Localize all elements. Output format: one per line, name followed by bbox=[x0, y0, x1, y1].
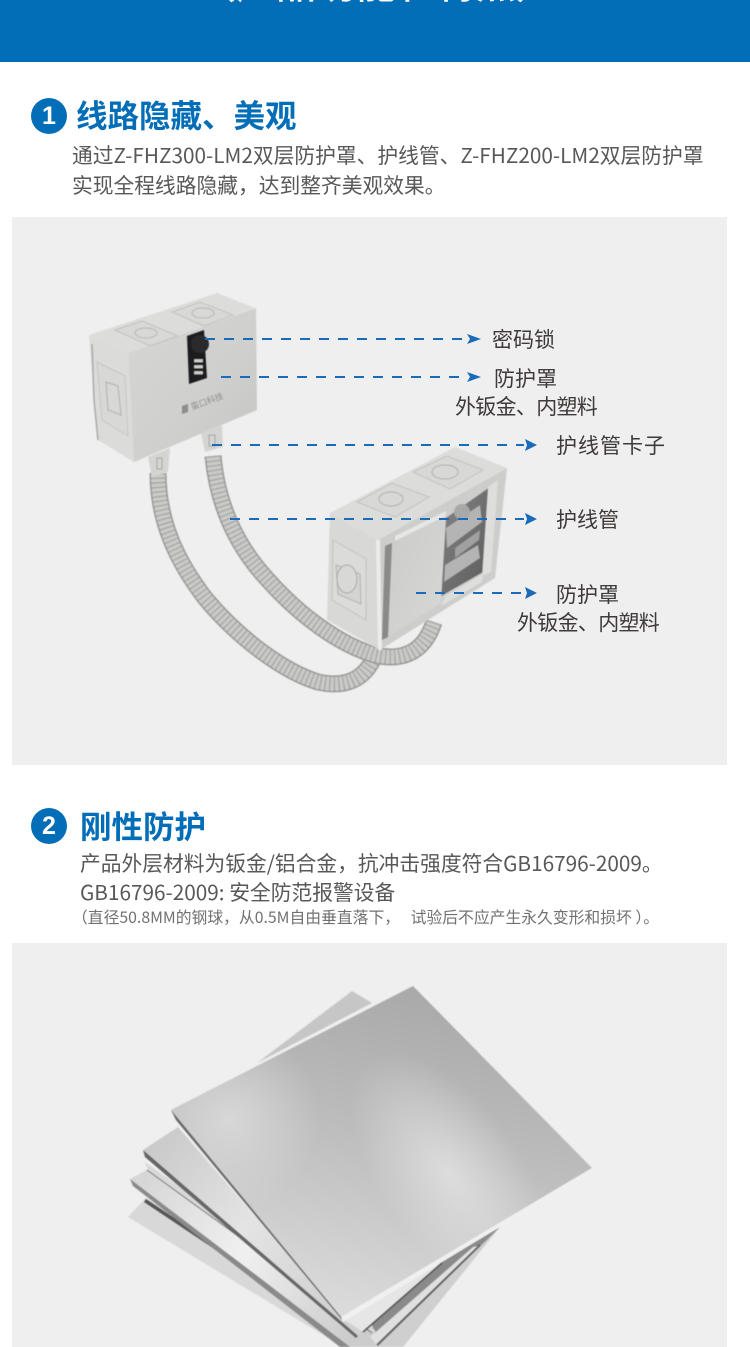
label: cover material: 外钣金、内塑料 bbox=[455, 391, 597, 421]
section 2 heading: 刚性防护 bbox=[80, 802, 206, 848]
leader line: protective cover bbox=[221, 372, 481, 382]
box 2: open protective cover bbox=[327, 447, 507, 650]
section 2 number badge: 2 bbox=[42, 812, 56, 840]
box 1: closed protective cover: 蛮口科技 bbox=[189, 390, 225, 413]
section 2 number badge bbox=[31, 808, 67, 844]
section 2 description bbox=[72, 847, 663, 928]
leader line: conduit clip bbox=[212, 439, 537, 451]
conduit: long outer bbox=[158, 473, 375, 684]
label: open cover material: 外钣金、内塑料 bbox=[517, 607, 659, 637]
section 2 description: 产品外层材料为钣金/铝合金，抗冲击强度符合GB16796-2009。 bbox=[80, 847, 663, 877]
section 1 number badge bbox=[31, 98, 67, 134]
label: open cover: 防护罩 bbox=[556, 579, 619, 609]
panel: sheet metal photo bbox=[12, 943, 727, 1347]
label: conduit: 护线管 bbox=[556, 504, 619, 534]
conduit: inner bbox=[213, 456, 434, 657]
label: conduit clip: 护线管卡子 bbox=[556, 430, 666, 460]
section 1 description: 实现全程线路隐藏，达到整齐美观效果。 bbox=[72, 169, 446, 199]
leader line: open cover bbox=[416, 587, 537, 599]
leader line: password lock bbox=[205, 334, 481, 344]
section 1 number badge: 1 bbox=[42, 102, 56, 130]
header banner bbox=[0, 0, 750, 62]
leader line: conduit bbox=[230, 513, 537, 525]
section 1 description bbox=[72, 139, 704, 199]
section 2 description: （直径50.8MM的钢球，从0.5M自由垂直落下， 试验后不应产生永久变形和损坏 ）。 bbox=[72, 905, 659, 928]
conduit clips bbox=[148, 425, 223, 477]
section 2 description: GB16796-2009: 安全防范报警设备 bbox=[80, 876, 395, 906]
illustration: stacked metal sheets bbox=[128, 986, 592, 1347]
section 1 heading: 线路隐藏、美观 bbox=[76, 91, 297, 137]
section 1 description: 通过Z-FHZ300-LM2双层防护罩、护线管、Z-FHZ200-LM2双层防护罩 bbox=[72, 139, 704, 169]
box 1: closed protective cover bbox=[89, 293, 257, 462]
panel: product diagram bbox=[12, 217, 727, 765]
label: password lock: 密码锁 bbox=[492, 324, 555, 354]
label: protective cover: 防护罩 bbox=[494, 363, 557, 393]
